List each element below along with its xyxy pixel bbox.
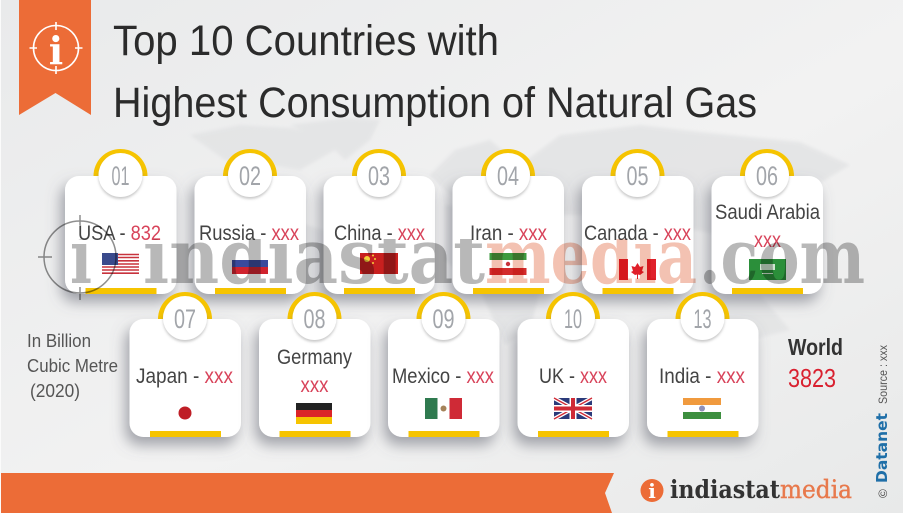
flag: USA xyxy=(102,253,139,274)
card 01 USA xyxy=(65,149,176,294)
card 05 Canada: 05 xyxy=(626,161,648,191)
left edge strip xyxy=(0,0,1,513)
flag: UK xyxy=(554,398,592,419)
card 08 Germany: xxx xyxy=(300,374,329,397)
banner with info icon xyxy=(19,0,91,115)
watermark xyxy=(38,212,865,301)
card 09 Mexico: Mexico - xxx xyxy=(392,365,494,388)
icon: watermark target xyxy=(38,215,116,300)
card 06 Saudi Arabia: Saudi Arabia xyxy=(715,201,820,224)
card 04 Iran: Iran - xxx xyxy=(470,222,547,245)
unit note xyxy=(27,331,118,401)
icon: info target: i xyxy=(49,28,63,73)
card 08 Germany: Germany xyxy=(277,346,352,369)
card 04 Iran xyxy=(452,149,564,294)
card 02 Russia: 02 xyxy=(239,161,261,191)
source credit: © xyxy=(876,489,890,498)
footer logo: media xyxy=(780,475,852,504)
flag: India xyxy=(683,398,721,419)
card 13 India xyxy=(647,292,758,437)
flag: Mexico xyxy=(425,398,462,419)
unit note: In Billion xyxy=(27,331,91,351)
watermark: media xyxy=(485,212,697,301)
card 09 Mexico: 09 xyxy=(432,304,454,334)
card 07 Japan: Japan - xxx xyxy=(136,365,233,388)
icon: logo info: i xyxy=(648,479,656,503)
unit note: Cubic Metre xyxy=(27,356,118,376)
watermark: .com xyxy=(699,212,865,301)
flag: Japan xyxy=(178,406,192,420)
flag: China xyxy=(360,253,398,274)
title: Highest Consumption of Natural Gas xyxy=(113,79,757,127)
world map backdrop xyxy=(190,118,850,345)
footer logo xyxy=(640,475,852,504)
icon: logo info xyxy=(640,479,664,503)
watermark: i xyxy=(70,212,92,301)
card 09 Mexico xyxy=(388,292,500,437)
card 02 Russia: Russia - xxx xyxy=(199,222,299,245)
card 10 UK xyxy=(518,292,629,437)
card 05 Canada xyxy=(582,149,694,294)
card 01 USA: 01 xyxy=(112,161,130,191)
title: Top 10 Countries with xyxy=(113,17,499,65)
card 02 Russia xyxy=(194,149,306,294)
card 04 Iran: 04 xyxy=(497,161,519,191)
card 07 Japan: 07 xyxy=(174,304,196,334)
card 08 Germany: 08 xyxy=(304,304,326,334)
watermark: indiastat xyxy=(143,212,485,301)
card 03 China: China - xxx xyxy=(334,222,425,245)
world total xyxy=(788,334,843,393)
card 05 Canada: Canada - xxx xyxy=(584,222,691,245)
source credit: Source : xxx xyxy=(876,345,890,404)
world total: World xyxy=(788,334,843,360)
title xyxy=(113,17,757,127)
card 08 Germany xyxy=(259,292,370,437)
card 03 China: 03 xyxy=(368,161,390,191)
source credit xyxy=(873,345,891,498)
card 06 Saudi Arabia xyxy=(712,149,823,294)
footer logo: indiastat xyxy=(670,475,780,504)
unit note: (2020) xyxy=(30,381,80,401)
flag: Canada xyxy=(619,259,656,280)
flag: Iran xyxy=(490,253,526,275)
card 06 Saudi Arabia: xxx xyxy=(754,229,781,252)
card 01 USA: USA - 832 xyxy=(78,222,161,245)
flag: Germany xyxy=(296,403,332,424)
card 07 Japan xyxy=(130,292,241,437)
footer ribbon xyxy=(1,473,614,513)
card 10 UK: 10 xyxy=(564,304,582,334)
world total: 3823 xyxy=(788,363,836,393)
source credit: Datanet xyxy=(873,413,891,483)
card 13 India: India - xxx xyxy=(659,365,745,388)
flag: Russia xyxy=(232,253,268,274)
card 10 UK: UK - xxx xyxy=(539,365,607,388)
card 13 India: 13 xyxy=(694,304,712,334)
card 06 Saudi Arabia: 06 xyxy=(756,161,778,191)
flag: Saudi Arabia xyxy=(749,259,786,280)
card 03 China xyxy=(324,149,435,294)
